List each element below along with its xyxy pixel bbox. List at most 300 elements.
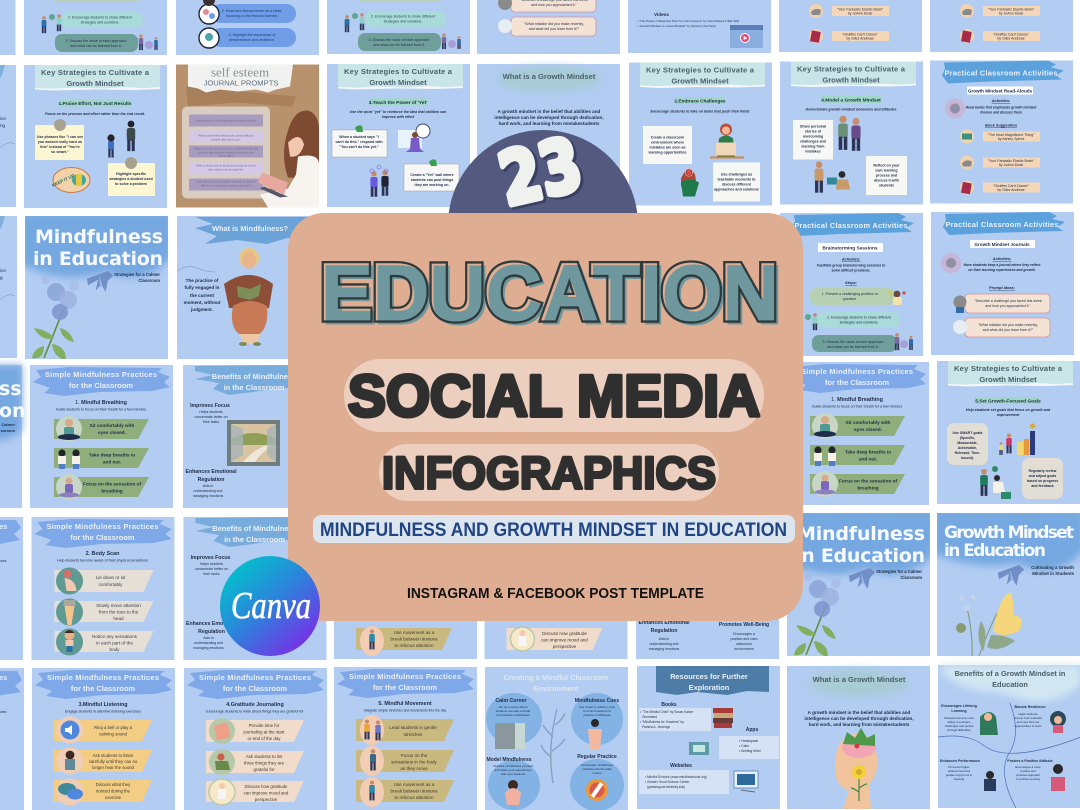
card title: for the Classroom [70,533,135,542]
videos list: • "The Power of Believing That You Can Improve" by Carol Dweck (TED Talk) [637,19,739,23]
card: growth mindset in education cover [932,508,1080,656]
step text: calming sound [99,732,127,736]
card title: Simple Mindfulness Practices [46,522,158,531]
sticky note two: process and [876,174,897,178]
benefit: improves focus: their tasks [203,420,219,424]
strategy pill: 1.Praise Effort, Not Just Results [58,101,132,107]
section pill [970,240,1035,248]
brush header [789,364,926,393]
apps list [719,736,779,759]
book row: "The Most Magnificent Thing" [988,133,1035,137]
section: regular practice: Incorporate mindfulness [581,763,614,767]
rounded note one: bound). [961,456,974,460]
movement band: Use movement as a [394,630,435,635]
step text: Notice any sensations [92,634,138,639]
benefit: lifelong learning: Learning [951,709,967,713]
brush header [196,517,314,547]
card title: Growth Mindset [822,76,880,84]
practice subtitle: Help students become aware of their physical sensations [57,558,148,562]
illustration: open window [227,420,280,466]
strategy description: Help students set goals that focus on growth and [966,408,1051,412]
benefit: improves focus: Improves Focus [190,403,230,409]
icon: seated chair [360,746,384,776]
torn note two: Create a "Yet" wall where [410,173,454,177]
sticky note two: Highlight specific [116,172,146,176]
torn header [35,65,160,90]
torn paper header: self esteem [211,64,269,80]
icon: group figures right [139,34,158,50]
benefit: lifelong learning: willing to embrace [947,720,971,724]
benefit: well-being: environment [734,647,754,651]
card title: What is a Growth Mindset [813,675,906,684]
prompt rows: How often do you compare yourself to others? [196,180,256,184]
benefit: positive attitude [1007,759,1065,791]
card title: Environment [533,684,579,693]
card: benefits of mindfulness, row four [183,365,326,508]
card: key strategy 1 praise effort [24,65,167,208]
section pill [818,243,883,252]
card title: Practical Classroom Activities [946,220,1058,229]
definition text: intelligence can be developed through dedication, [804,716,914,721]
prompt bubble one [511,0,596,12]
step text: eyes closed. [98,430,126,435]
step text: Focus on the [401,753,428,758]
definition text: A growth mindset is the belief that abilities and [808,710,911,715]
step text: sensations in the body [391,760,438,764]
sticky note one: overcoming [803,134,823,138]
icon: two children breathing [814,446,836,466]
sticky note two: strategies a student used [109,177,153,181]
rounded note one [947,423,988,465]
step text: Slowly move attention [96,603,141,608]
step text: breathing [857,486,879,490]
card title: Simple Mindfulness Practices [801,367,913,376]
activities badge [941,253,961,273]
step text: breathing [101,488,123,494]
cover title: in Education [33,248,163,270]
step two pill [199,4,296,24]
definition text: judgment. [190,307,213,312]
torn note two: approaches and solutions [714,188,759,192]
step bands [356,719,454,741]
step text: eyes closed. [854,427,882,432]
brush header [792,213,914,236]
step text: Provide time for [249,723,280,728]
benefit: resilience: Boosts Resilience [1015,705,1045,709]
card title: Practical Classroom Activities [944,68,1058,78]
badge number 23: 23 [492,123,589,223]
icon: seated meditation [812,413,838,439]
torn note one: "You can't do this yet." [339,145,379,149]
watercolor wash [932,508,1080,570]
icon: ribbon [87,271,113,292]
strategy description: Demonstrate growth mindset behaviors and attitudes [805,108,897,112]
websites list: • Mindful Schools (www.mindfulschools.org) [645,775,707,779]
book row: "Giraffes Can't Dance" [993,184,1030,188]
canva logo badge [220,556,320,656]
benefit: emotional regulation: Regulation [651,628,677,634]
benefit: improves focus: their tasks [204,572,220,576]
icon: gratitude person [209,779,235,805]
card: simple mindfulness 3 listening [32,668,175,810]
icon: seated person checklist [398,124,430,152]
prompt bubble two: and what did you learn from it?" [983,328,1034,332]
book suggestion label: Book Suggestion [985,122,1018,128]
card: what is a growth mindset, row two [477,64,620,207]
step two band: 2. Encourage students to share different [68,16,132,20]
section pill: Growth Mindset Read-Alouds [968,88,1033,94]
card: key strategy 5 set growth-focused goals [937,361,1080,504]
book row: by JoAnn Deak [999,163,1023,167]
icon: video player [730,25,763,48]
definition text: A growth mindset is the belief that abilities and [498,109,601,114]
torn note two: Use challenges as [721,172,752,176]
gratitude band [506,627,602,651]
strategy pill: 3.Teach the Power of 'Yet' [369,100,427,106]
card: brainstorm steps, top row [24,0,167,55]
step two band: strategies and solutions. [81,20,119,24]
step text: Sit comfortably with [846,420,891,425]
sticky note one: this" instead of "You're [40,145,80,149]
apps list: • Calm [739,744,749,748]
strategy pill: 4.Model a Growth Mindset [821,97,881,103]
step text: three things they are [244,760,285,766]
torn note two: students can post things [411,178,453,182]
torn note two [404,159,459,191]
strategy pill: 2.Embrace Challenges [674,98,726,104]
card: what is a growth mindset [787,666,930,809]
step two band: strategies and solutions. [384,20,422,24]
cover title: Growth Mindset [944,523,1074,543]
activities description: themes and discuss them [980,110,1022,114]
sticky note one: you worked really hard on [38,140,82,144]
card title: Key Strategies to Cultivate a [41,68,150,77]
prompt bubble two [965,318,1050,337]
torn note one: can't do this," respond with [335,140,383,144]
section: calm corner: Calm Corner [495,698,527,704]
section: regular practice: practices into the daily [582,767,612,771]
book row: by JoAnn Deak [999,12,1023,16]
brush header [35,670,172,699]
section: mindfulness cues: to remind students to [583,709,611,713]
websites list: • Greater Good Science Center [645,780,690,784]
prompt rows: Create a list of 10 compliments to give yourself. [196,118,257,122]
sticky note one: challenges and [800,140,826,144]
gratitude band: can improve mood and [541,638,588,642]
icon: two children breathing [58,449,80,469]
torn note one: mistakes are seen as [650,146,685,150]
prompt bubble one: "Describe a challenge you faced this week [974,299,1042,303]
left edge partial cards: ssroom [1,428,15,433]
keep it up badge: KEEP IT UP [51,173,75,188]
gratitude band: perspective [553,644,577,649]
sticky note one: mistakes [805,150,821,154]
sticky note one [35,119,84,160]
brush header [33,367,170,396]
card title: Benefits of Mindfulness [212,524,297,533]
torn note one: Create a classroom [651,136,684,140]
step three band [812,335,897,352]
step text: and out. [859,456,877,462]
card title: for the Classroom [825,378,889,387]
step bands [810,416,905,436]
activities description: Have students keep a journal where they reflect [964,263,1041,267]
torn header [948,361,1073,386]
card title: Key Strategies to Cultivate a [797,64,906,74]
section: mindfulness cues: practice mindfulness [583,713,611,717]
benefit: resilience: and view them as [1017,720,1040,724]
watercolor wash [942,665,1080,702]
book row: by Ashley Spires [998,137,1024,141]
step text: stretches [404,732,423,737]
illustration: blue flowers [794,573,841,657]
torn header [791,62,916,87]
benefit: performance: learning [954,777,965,781]
icon: discussion pair [980,466,1011,499]
videos heading: Videos [654,12,669,17]
section: model mindfulness: Practice mindfulness yourself [493,764,533,768]
step three pill: 3. Highlight the importance of [229,33,275,37]
main title panel [288,213,803,621]
card title: in the Classroom [224,535,285,544]
benefit: well-being: Promotes Well-Being [719,622,769,628]
step text: Focus on the sensation of [839,478,897,484]
benefit: lifelong learning: challenges and persist [945,724,974,728]
brush header [34,519,172,548]
card: benefits of mindfulness, row five [184,517,326,660]
card title: Benefits of a Growth Mindset in [955,669,1066,678]
sticky note one: stories of [805,130,822,134]
icon: movement [360,777,384,807]
benefit: performance: Promotes higher [948,765,970,769]
websites list [639,770,729,794]
benefit: emotional regulation: managing emotions [649,647,680,651]
step text: as they move [400,766,428,771]
activities badge [945,98,965,118]
definition text: hard work, and learning from mistakestudents [809,722,910,727]
brush header [942,60,1064,84]
step two pill: focusing on the lessons learned. [226,14,278,18]
card: brainstorm steps, top row second [327,0,470,54]
sticky note one: learning from [802,144,824,148]
benefit: well-being: positive and calm [730,637,758,641]
template caption: INSTAGRAM & FACEBOOK POST TEMPLATE [407,586,704,602]
step text: can improve mood and [244,790,289,796]
step text: Ask students to list [246,754,283,759]
benefit: improves focus: Improves Focus [191,555,230,561]
activities description: Read books that emphasize growth mindset [966,106,1037,110]
prompt bubble two: "What mistake did you make recently, [524,22,584,26]
strategy description: improvement [997,413,1020,417]
practice heading: 4.Gratitude Journaling [226,702,284,708]
step text: comfortably [99,582,123,587]
badge number 23: 23 [494,124,592,224]
step one band: 1. Present a challenging problem or [822,292,879,296]
sticky note two [866,156,907,195]
step three band [55,34,138,52]
prompt bubble one: and how you approached it." [985,304,1031,308]
icon: seated meditation [56,416,82,442]
left edge partial cards: utes [0,710,7,714]
card title: Education [992,680,1028,689]
left edge partial cards: ng [0,123,6,128]
pill: infographics: INFOGRAPHICS [382,448,716,498]
header block [656,666,769,695]
benefit: improves focus [191,555,230,576]
torn note one [332,125,387,157]
card: videos resources, top row [628,0,771,53]
torn note two: they are working on. [415,183,449,187]
torn header [338,64,463,90]
illustration: woman reading [224,248,273,346]
benefit: emotional regulation [638,620,690,651]
step bands [54,570,154,592]
websites list: (greatergood.berkeley.edu) [647,785,685,789]
canva logo badge: Canva [231,585,311,627]
movement band: to refocus attention [394,643,434,648]
icon: legs [56,598,83,626]
sticky note two [108,157,155,196]
step three band: and what can be learned from it. [827,345,879,349]
brush header [943,212,1065,235]
icon: focus meditation [56,474,82,500]
torn paper header: JOURNAL PROMPTS [204,78,278,88]
benefit: positive attitude: Encourages a more [1015,765,1041,769]
step three band [358,33,441,51]
step text: Use movement as a [394,782,435,787]
step text: exercise [105,795,122,800]
benefit: enhances emotional regulation: Aids in [203,636,214,640]
books list [639,708,711,731]
watercolor wash [803,513,930,578]
benefit: resilience: recover from setbacks [1014,716,1043,720]
sticky note one: so smart." [51,150,69,154]
strategy description: Encourage students to take on tasks that push their limits [650,110,750,114]
benefit: enhances emotional regulation: managing emotions [193,646,224,650]
decorative wave [177,267,215,272]
icon: apps illustration [689,742,709,755]
icon: idea person [888,291,906,305]
step text: carefully until they can no [89,759,138,764]
benefit: positive attitude: Fosters a Positive Attitude [1007,759,1053,763]
watercolor wash [20,211,173,277]
apps list: • Headspace [739,739,758,743]
benefit: lifelong learning: Students become more [944,716,974,720]
card title: Benefits of Mindfulness [212,372,296,381]
step one band [53,0,140,2]
keep it up badge [51,168,90,192]
step text: Sit comfortably with [90,423,135,428]
rounded note one: (Specific, [960,436,975,440]
definition text: intelligence can be developed through dedication, [494,115,604,120]
prompt rows: doing right? [218,154,234,158]
card: practical classroom brainstorming sessions [780,213,923,356]
practice heading: 1. Mindful Breathing [75,400,127,406]
brush header [195,365,313,395]
step one band [356,0,443,1]
brush header [195,217,320,244]
prompt rows: people often give you? [211,138,241,142]
benefit: enhances emotional regulation [185,469,237,498]
step two pill: 2. Read and discuss these as a class, [222,9,282,13]
step text: Ask students to listen [93,753,134,758]
icon: two people high five [370,165,389,197]
benefit: performance [940,759,996,791]
websites heading: Websites [670,763,692,769]
strategy pill [975,397,1041,404]
icon: speaker [56,716,84,744]
section: calm corner: students can take a break [496,709,531,713]
rounded note one: Measurable, [957,441,978,445]
benefit: enhances emotional regulation: Enhances Emotional [186,621,238,627]
strategy pill [674,97,726,104]
card title: What is a Growth Mindset [503,72,596,81]
step text: body [110,647,120,652]
card: simple mindfulness 5 bottom, row five [334,516,477,659]
icon: ribbon [849,568,875,589]
torn header [640,62,765,88]
torn note one: When a student says "I [339,135,379,139]
benefit: improves focus [190,403,230,424]
benefit: well-being: Encourages a [733,632,755,636]
strategy pill: 5.Set Growth-Focused Goals [975,398,1041,404]
left edge partial cards: g [0,275,3,280]
step text: Take deep breaths in [89,452,135,458]
benefit: emotional regulation: understanding and [650,642,679,646]
book row [809,29,889,43]
card title: Exploration [689,683,730,692]
benefit: improves focus: concentrate better on [194,415,228,419]
brush header [187,670,324,699]
section: calm corner: Set up a space where [498,705,528,709]
kraft paper band [186,86,296,106]
step text: Take deep breaths in [845,450,891,454]
card: creating a mindful classroom environment [485,667,628,810]
step text: to refocus attention [394,795,434,800]
benefit: lifelong learning [941,704,998,735]
section: model mindfulness: and share your experiences [494,768,532,772]
card: key strategy 4 model a growth mindset [780,62,923,204]
benefit: lifelong learning: Encourages Lifelong [941,704,977,708]
torn note one: environment where [651,140,684,144]
section: model mindfulness: Model Mindfulness [486,757,532,763]
torn note one: learning opportunities [649,150,686,154]
prompt rows: What compliment about your personality do [198,134,254,138]
section: mindfulness cues: Use visual or auditory cues [579,705,616,709]
activities description: on their learning experiences and growth. [968,268,1036,272]
card: book list, top row two [930,0,1073,52]
card title: in the Classroom [224,383,285,392]
torn note two [713,162,760,202]
dark semicircle badge behind number [448,130,638,320]
step text: Discuss what they [96,782,131,787]
benefit: enhances emotional regulation: Regulation [198,477,224,483]
apps list: • Smiling Mind [739,749,761,753]
card title: Simple Mindfulness Practices [45,370,157,379]
torn note two: teachable moments to [718,178,756,182]
book row: "Giraffes Can't Dance" [842,32,879,36]
card: practical classroom activities read-alouds [930,60,1073,204]
watercolor wash [809,669,909,697]
icon: group figures left [345,13,364,32]
books list: Patricia A. Jennings [642,725,670,729]
icon: group figures right [442,33,461,49]
card title: Practical Classroom Activities [794,221,908,230]
heading: EDUCATION: EDUCATION [323,250,781,339]
cover subtitle: Strategies for a Calmer [876,569,922,574]
step three band: 3. Discuss the value of each approach [823,340,883,344]
book row: "Giraffes Can't Dance" [993,32,1030,36]
